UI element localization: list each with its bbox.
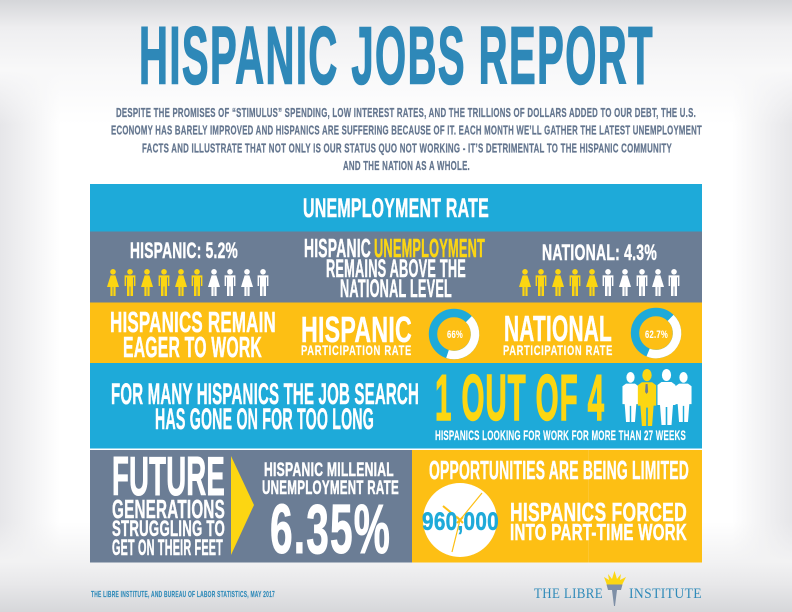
stat: 6.35%: 6.35% — [270, 490, 391, 568]
heading: future generations — [112, 445, 225, 560]
heading: national rate: NATIONAL: 4.3% — [542, 240, 657, 265]
heading: future generations: FUTURE — [112, 445, 225, 507]
heading: job search message: HAS GONE ON FOR TOO LONG — [155, 403, 374, 436]
heading: hispanic rate: HISPANIC: 5.2% — [130, 238, 238, 263]
intro text block: AND THE NATION AS A WHOLE. — [343, 159, 470, 173]
icon row: hispanic 5.2 of 10 — [107, 269, 268, 296]
arrow — [231, 456, 254, 555]
heading: eager to work — [110, 307, 276, 364]
heading: job search message — [111, 378, 419, 436]
heading: future generations: GENERATIONS — [112, 494, 225, 524]
panel: unemployment rate header: UNEMPLOYMENT RATE — [303, 193, 489, 223]
donut: national 62.7% — [635, 312, 677, 354]
national participation label: PARTICIPATION RATE — [503, 342, 613, 358]
donut: hispanic 66%: 66% — [447, 329, 463, 341]
icon: torch — [604, 571, 626, 606]
panel: future generations — [90, 445, 412, 568]
logo: the libre institute — [534, 571, 702, 606]
heading: job search message: FOR MANY HISPANICS THE JOB SEARCH — [111, 378, 419, 411]
center message: HISPANIC — [304, 233, 371, 263]
heading: eager to work: HISPANICS REMAIN — [110, 307, 276, 339]
millenial label — [262, 460, 399, 499]
hispanic participation label: PARTICIPATION RATE — [301, 342, 412, 358]
panel: job search — [90, 361, 702, 448]
donut: national 62.7%: 62.7% — [645, 329, 668, 341]
panel: unemployment comparison — [90, 232, 702, 303]
center message: REMAINS ABOVE THE — [326, 255, 466, 283]
text: forced into part-time: INTO PART-TIME WORK — [510, 519, 687, 545]
panel: unemployment comparison: UNEMPLOYMENT — [374, 233, 485, 263]
logo: the libre institute: INSTITUTE — [629, 586, 702, 602]
hispanic participation label: HISPANIC — [301, 309, 412, 350]
national participation label: NATIONAL — [504, 308, 612, 349]
donut: hispanic 66% — [433, 313, 475, 355]
text: forced into part-time — [510, 497, 687, 545]
heading: eager to work: EAGER TO WORK — [123, 332, 262, 364]
center message — [304, 233, 485, 303]
icon: four people — [622, 369, 692, 426]
icon: clock — [423, 483, 497, 557]
millenial label: HISPANIC MILLENIAL — [264, 460, 394, 481]
heading: future generations: STRUGGLING TO — [112, 516, 225, 541]
panel: unemployment rate header — [90, 184, 702, 232]
panel: opportunities — [412, 450, 702, 562]
center message: NATIONAL LEVEL — [340, 275, 452, 303]
hispanic participation label — [301, 309, 412, 358]
text: forced into part-time: HISPANICS FORCED — [510, 497, 687, 527]
icon row: national 4.3 of 10 — [519, 269, 679, 296]
millenial label: UNEMPLOYMENT RATE — [262, 478, 399, 499]
national participation label — [503, 308, 613, 358]
intro text block — [111, 106, 702, 173]
panel: participation — [90, 302, 702, 364]
logo: the libre institute: THE LIBRE — [534, 586, 603, 602]
heading: future generations: GET ON THEIR FEET — [112, 535, 223, 560]
stat: 960,000: 960,000 — [422, 508, 499, 536]
source note: THE LIBRE INSTITUTE, AND BUREAU OF LABOR STATISTICS, MAY 2017 — [91, 589, 275, 599]
